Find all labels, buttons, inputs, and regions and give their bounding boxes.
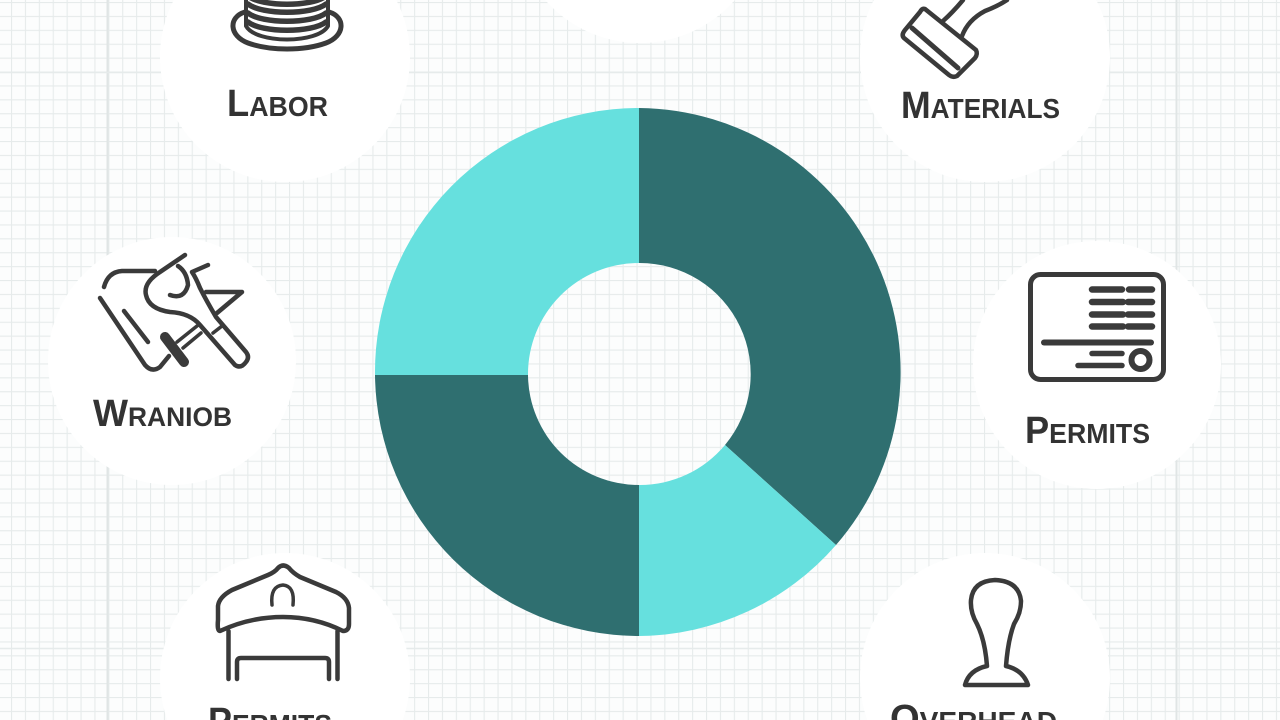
panel: wrench <box>48 237 296 485</box>
segment: dark, bottom left <box>375 375 639 636</box>
icon: certificate card <box>1030 274 1164 380</box>
icon: stamp <box>965 580 1028 685</box>
panel: permits, right <box>973 241 1221 489</box>
panel: top, cropped circle <box>514 0 766 43</box>
segment: light, bottom right <box>639 445 836 636</box>
panel: permits, bottom left <box>160 553 410 720</box>
segment: dark, top right <box>639 108 901 545</box>
segment: light, top left <box>375 108 639 375</box>
icon: roller <box>903 0 1007 77</box>
icon: cap on frame <box>218 566 349 679</box>
icon: trowel and wrench <box>100 255 248 370</box>
label: permits, right: PERMITS <box>1025 410 1150 452</box>
label: labor: LABOR <box>227 83 328 125</box>
label: materials: MATERIALS <box>901 85 1060 127</box>
panel: materials <box>860 0 1110 182</box>
panel: overhead <box>860 553 1110 720</box>
icon: coil on base <box>233 0 341 49</box>
label: wranob: WRANIOB <box>93 393 232 435</box>
donut chart <box>375 108 901 636</box>
panel: labor <box>160 0 410 182</box>
